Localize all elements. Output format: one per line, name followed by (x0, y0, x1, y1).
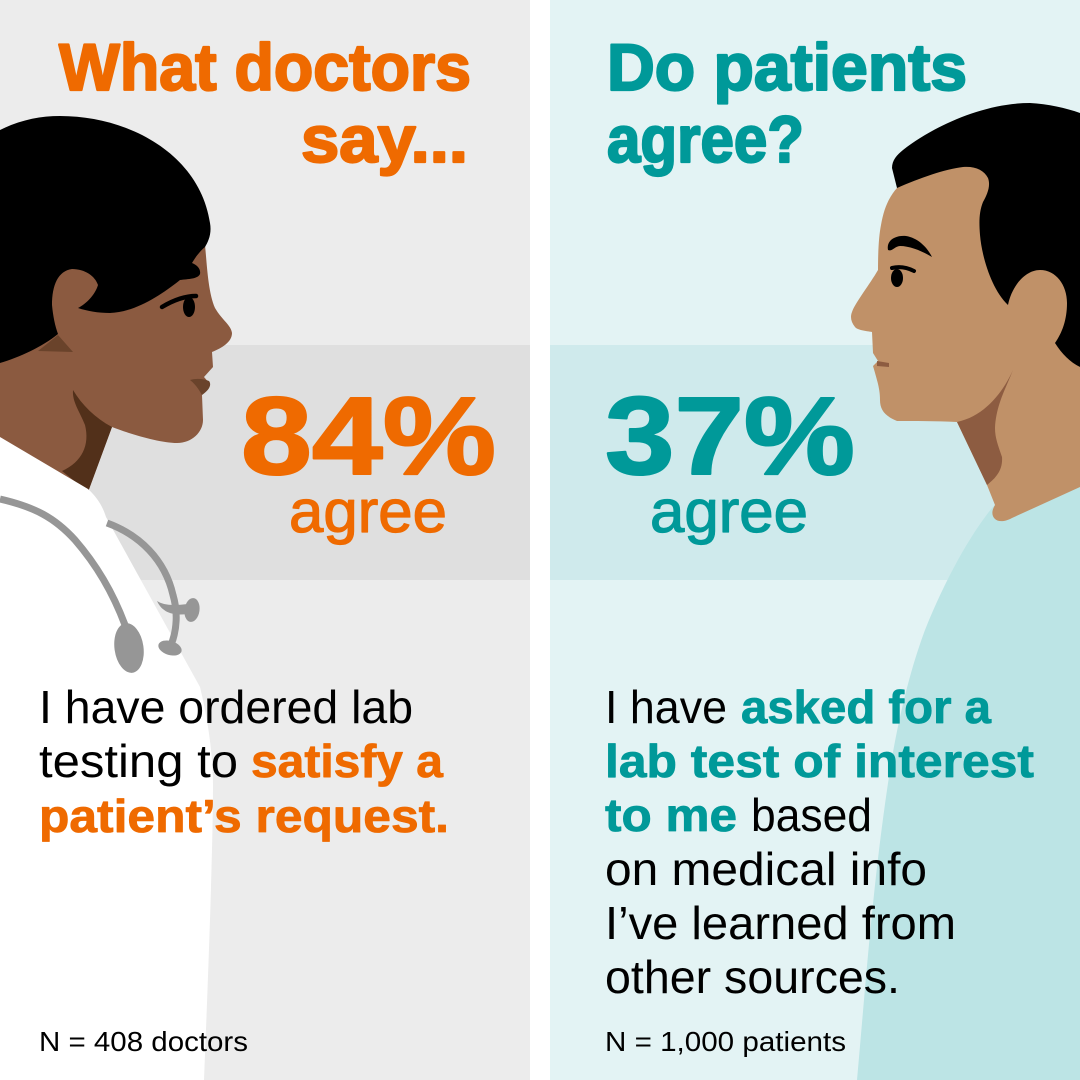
text block: doctor statement: I have ordered lab (39, 681, 413, 733)
icon: patient eye (891, 267, 914, 287)
text block: patient statement: lab test of interest (605, 735, 1034, 787)
text block: doctor statement: patient’s request. (39, 790, 449, 842)
text block: doctor statement: satisfy a (251, 735, 443, 787)
stat: 37% agree (605, 375, 855, 545)
stat: 84% agree: 84% (241, 375, 496, 498)
stat: 37% agree: agree (650, 478, 808, 545)
stat: 84% agree (241, 375, 496, 545)
illustration: patient profile (851, 103, 1080, 1080)
heading: What doctors say: say... (301, 102, 468, 176)
text block: patient statement: on medical info (605, 843, 927, 895)
text block: patient statement: asked for a (741, 681, 991, 733)
icon: patient brow (888, 236, 932, 257)
text block: patient statement: I have (605, 681, 727, 733)
illustration: doctor profile (0, 116, 232, 1080)
icon: doctor eye (162, 296, 196, 317)
stat: 84% agree: agree (289, 478, 447, 545)
footnote: doctor sample size: N = 408 doctors (39, 1026, 248, 1057)
text block: patient statement: based (751, 789, 872, 841)
text block: doctor statement (39, 681, 449, 842)
heading: Do patients agree: agree? (607, 102, 804, 176)
text block: doctor statement: testing to (39, 735, 238, 787)
icon: stethoscope (0, 499, 201, 675)
panel: patients (550, 0, 1080, 1080)
heading: Do patients agree (607, 30, 967, 176)
footnote: patient sample size: N = 1,000 patients (605, 1026, 846, 1057)
icon: doctor coat (0, 437, 213, 1080)
stat: 37% agree: 37% (605, 375, 855, 498)
panel: doctors (0, 0, 530, 1080)
icon: patient head and neck (851, 167, 1080, 521)
text block: patient statement: other sources. (605, 951, 900, 1003)
heading: What doctors say (59, 30, 471, 176)
icon: patient hair (892, 103, 1080, 367)
text block: patient statement: I’ve learned from (605, 897, 956, 949)
icon: doctor hair (0, 116, 211, 363)
text block: patient statement (605, 681, 1034, 1003)
heading: What doctors say: What doctors (59, 30, 471, 104)
heading: Do patients agree: Do patients (607, 30, 967, 104)
text block: patient statement: to me (605, 789, 737, 841)
icon: patient shirt (857, 480, 1080, 1080)
